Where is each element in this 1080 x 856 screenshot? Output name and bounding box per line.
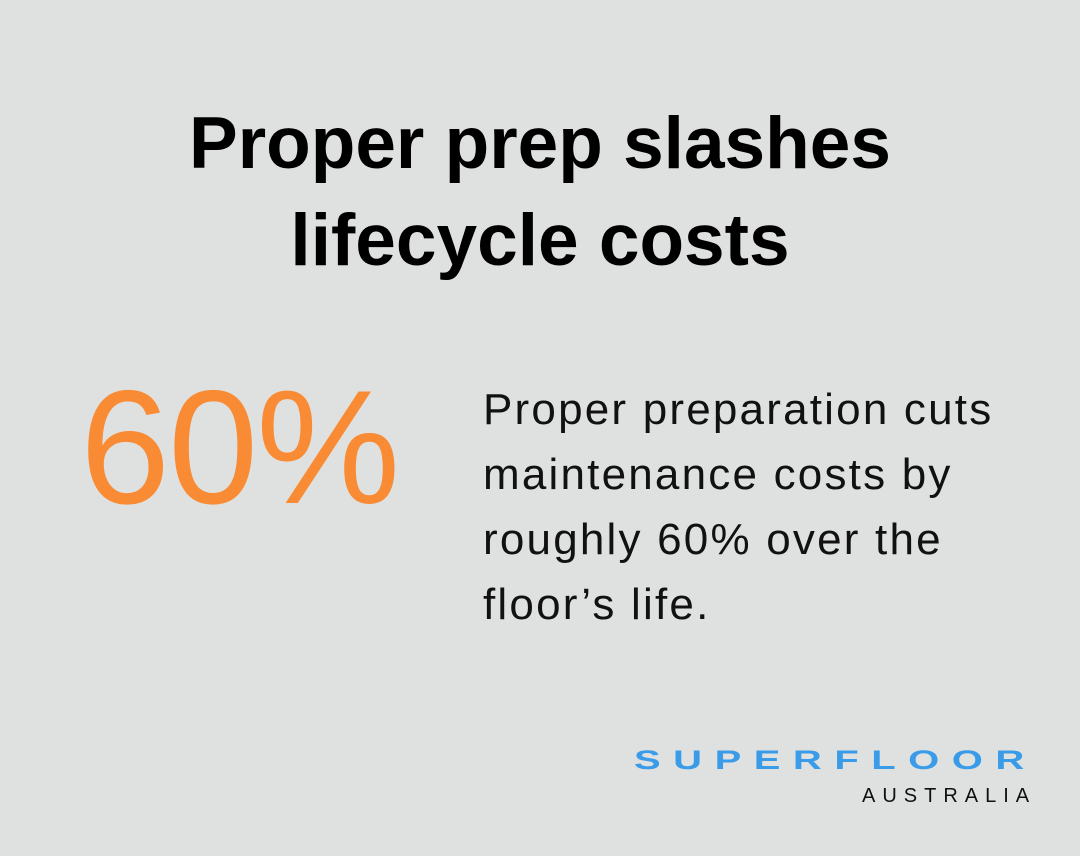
logo: australia: AUSTRALIA: [862, 785, 1036, 807]
title: lifecycle costs: [290, 200, 790, 281]
description text: roughly 60% over the: [483, 515, 943, 564]
title: Proper prep slashes: [189, 103, 891, 184]
description text: [483, 385, 993, 629]
logo: [634, 746, 1037, 807]
description text: maintenance costs by: [483, 450, 953, 499]
logo: superfloor: SUPERFLOOR: [634, 746, 1037, 775]
title: [189, 103, 891, 281]
big stat: 60%: [80, 357, 398, 538]
description text: floor’s life.: [483, 580, 711, 629]
description text: Proper preparation cuts: [483, 385, 993, 434]
